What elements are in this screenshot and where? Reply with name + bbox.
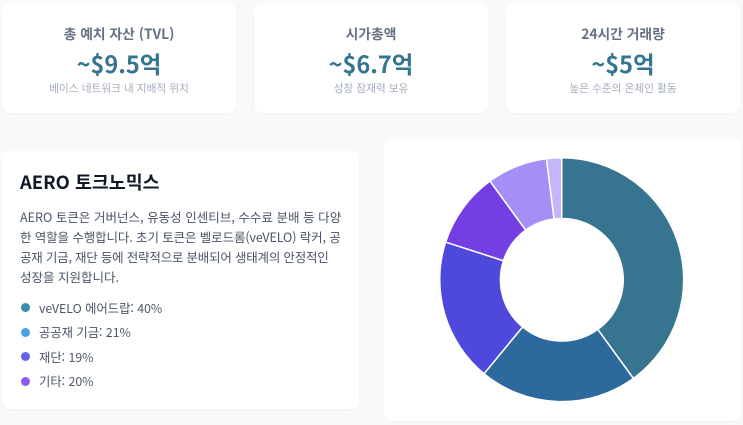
panel: donut chart [384, 139, 741, 421]
stat card: market cap [254, 3, 488, 113]
legend dot: foundation [21, 352, 30, 361]
stat label: 24시간 거래량 [581, 23, 665, 43]
slice: veVELO 40% [562, 158, 684, 378]
text block: description: 공재 기금, 재단 등에 전략적으로 분배되어 생태계의 안정적인 [20, 247, 329, 266]
stat label: 시가총액 [346, 23, 396, 43]
legend text: public goods: 공공재 기금: 21% [39, 323, 131, 341]
slice: other 8% [490, 159, 554, 230]
text block: description [20, 207, 341, 286]
stat value: ~$6.7억 [329, 46, 413, 80]
stat note: 높은 수준의 온체인 활동 [569, 80, 677, 96]
legend dot: public goods [21, 328, 30, 337]
stat value: ~$5억 [591, 46, 655, 80]
stat label: 총 예치 자산 (TVL) [64, 23, 174, 43]
stat card: 24h volume [506, 3, 740, 113]
slice: foundation 19% [440, 242, 523, 374]
legend dot: other [21, 377, 30, 386]
stat card: TVL [2, 3, 236, 113]
slice: other 10% [446, 181, 526, 261]
text block: description: 성장을 지원합니다. [20, 267, 119, 286]
slice: public goods 21% [484, 327, 633, 402]
legend text: veVELO: veVELO 에어드랍: 40% [39, 299, 162, 317]
text block: description: 한 역할을 수행합니다. 초기 토큰은 벨로드롬(veVELO) 락커, 공 [20, 227, 341, 246]
slice: other 2% [546, 158, 562, 219]
stat value: ~$9.5억 [77, 46, 161, 80]
legend text: foundation: 재단: 19% [39, 348, 93, 366]
legend text: other: 기타: 20% [39, 372, 93, 390]
stat note: 성장 잠재력 보유 [334, 80, 408, 96]
stat note: 베이스 네트워크 내 지배적 위치 [49, 80, 189, 96]
panel: AERO tokenomics [2, 151, 359, 409]
text block: description: AERO 토큰은 거버넌스, 유동성 인센티브, 수수료 분배 등 다양 [20, 207, 341, 226]
heading: AERO tokenomics: AERO 토크노믹스 [20, 169, 160, 195]
legend dot: veVELO [21, 303, 30, 312]
legend [21, 299, 162, 390]
